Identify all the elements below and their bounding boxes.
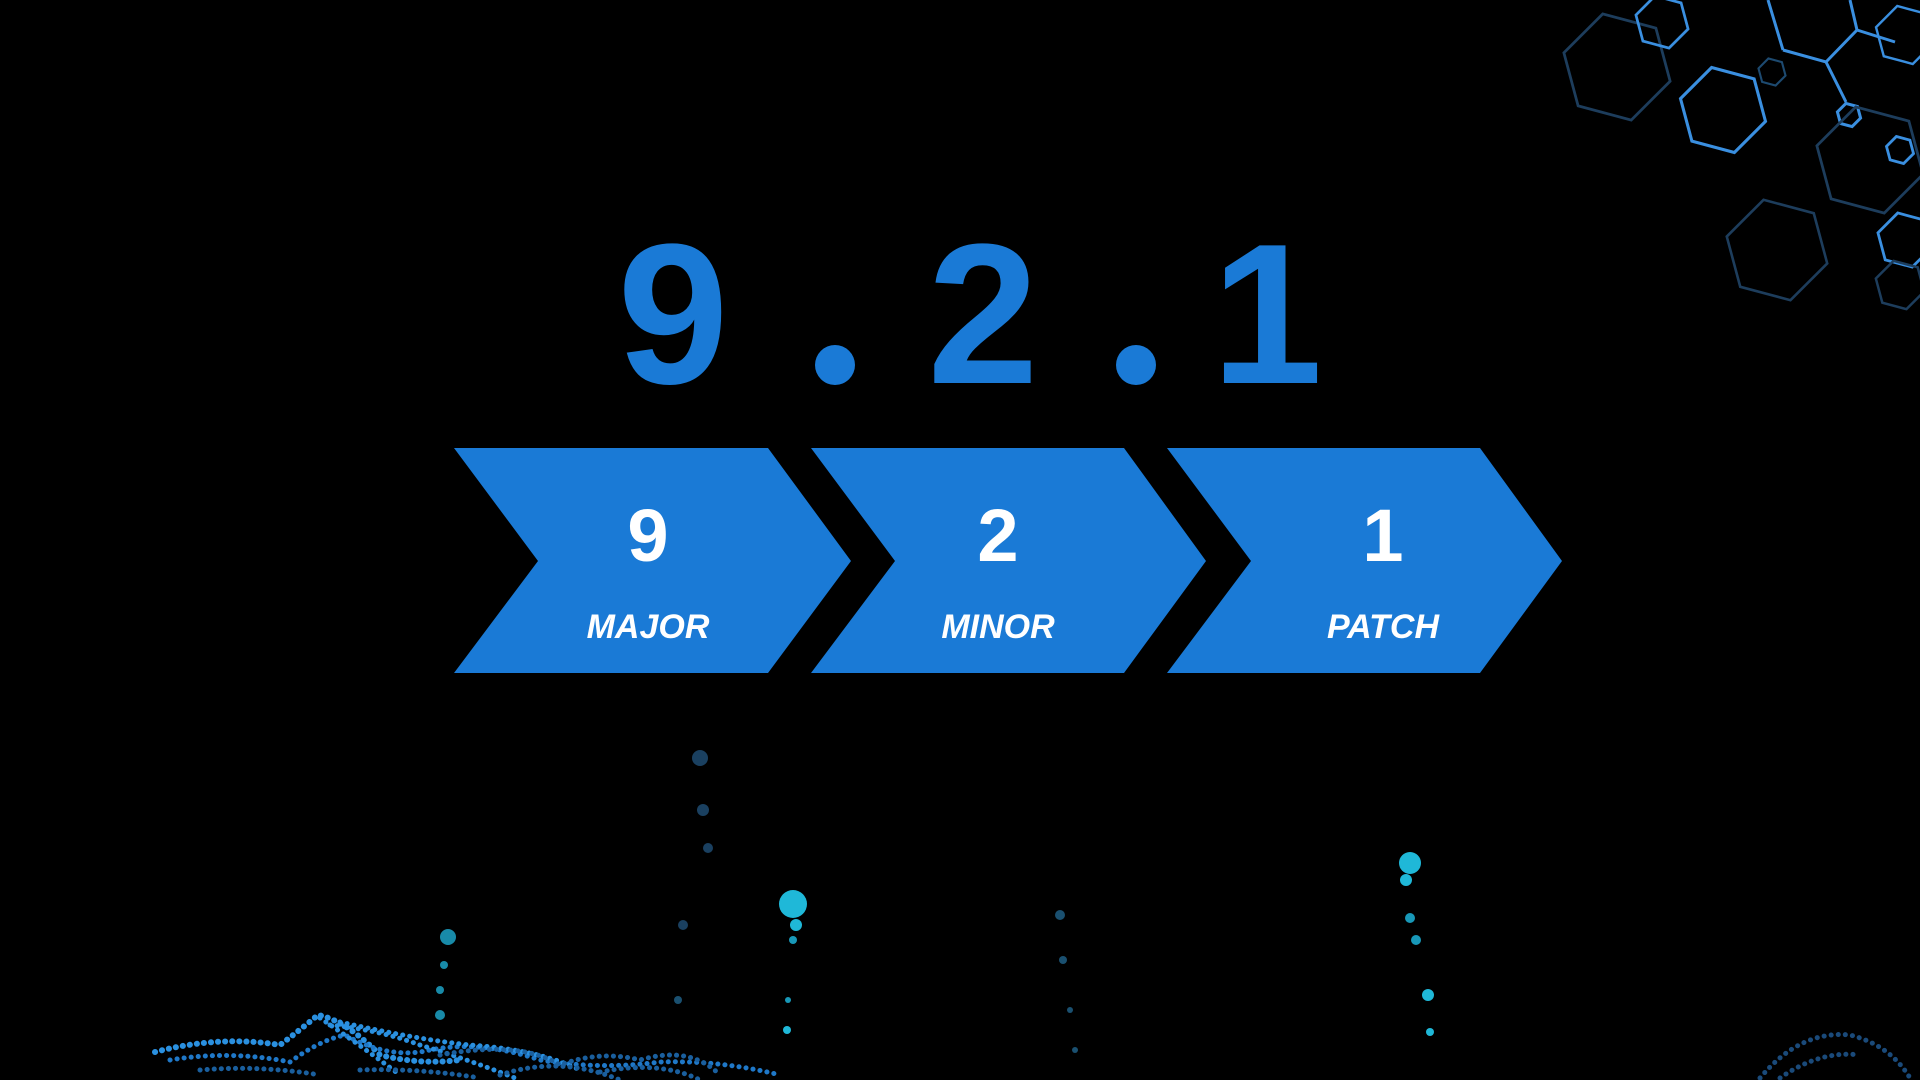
- chevron: minor: [811, 448, 1206, 673]
- title: version number 9.2.1: 2: [927, 203, 1039, 426]
- title: version number 9.2.1: 9: [617, 203, 729, 426]
- chevron: major: [454, 448, 851, 673]
- chevron: patch: 1: [1362, 494, 1404, 577]
- chevron: minor: 2: [977, 494, 1019, 577]
- decoration: hexagon network: [1552, 0, 1920, 312]
- chevron: patch: [1167, 448, 1562, 673]
- chevron: major: 9: [627, 494, 669, 577]
- decoration: glowing particle streams: [435, 750, 1434, 1053]
- chevron: major: MAJOR: [587, 608, 710, 646]
- decoration: particle wave: [155, 1015, 1910, 1080]
- chevron: patch: PATCH: [1327, 608, 1440, 646]
- title: version number 9.2.1: 1: [1211, 203, 1323, 426]
- chevron: minor: MINOR: [941, 608, 1055, 646]
- title: version number 9.2.1: [617, 203, 1323, 426]
